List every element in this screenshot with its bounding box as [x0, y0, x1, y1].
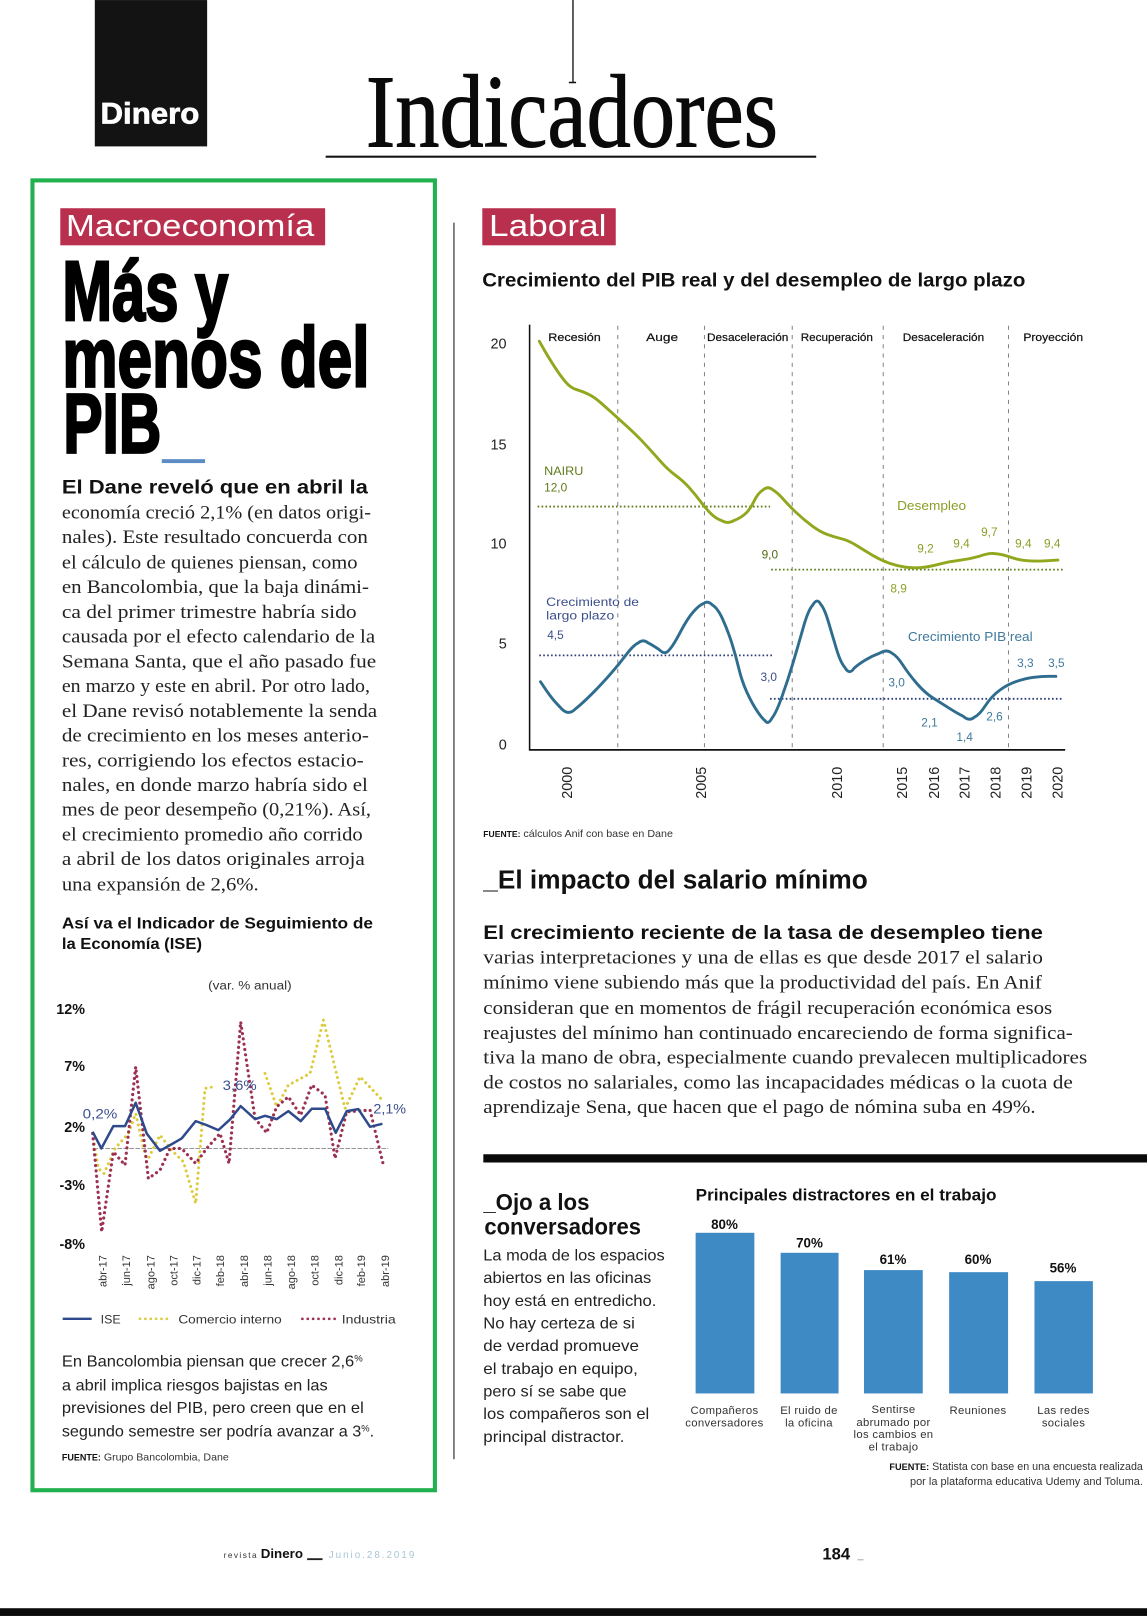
- annotations: unemployment: Desempleo: [897, 498, 966, 513]
- footer: magazine credit: Dinero: [261, 1546, 303, 1561]
- axis labels: 10: [491, 536, 507, 552]
- annotations: unemployment: 9,4: [953, 536, 970, 550]
- text block: article on April GDP: ca del primer trimestre habría sido: [62, 602, 357, 623]
- line chart: ISE, comercio interno, industria: ago-17: [145, 1255, 157, 1289]
- text block: Ojo a los conversadores: de verdad promueve: [483, 1338, 639, 1355]
- heading: impacto del salario mínimo: _El impacto del salario mínimo: [482, 866, 868, 894]
- text block: salario mínimo: tiva la mano de obra, especialmente cuando prevalecen multiplicadores: [483, 1048, 1087, 1069]
- section tag: Macroeconomía: Macroeconomía: [66, 208, 315, 243]
- line chart: ISE, comercio interno, industria: dic-17: [192, 1255, 204, 1285]
- annotations: growth: 3,0: [888, 675, 905, 689]
- text block: salario mínimo: [483, 923, 1087, 1118]
- text block: article on April GDP: a abril de los datos originales arroja: [62, 849, 365, 870]
- series: ISE: [93, 1103, 382, 1151]
- annotations: growth: Crecimiento PIB real: [908, 629, 1033, 644]
- annotations: growth: 1,4: [956, 730, 973, 744]
- axis labels: 2018: [989, 767, 1005, 799]
- axis labels: 5: [499, 636, 507, 652]
- source: Statista: FUENTE: Statista con base en una encuesta realizada: [889, 1461, 1144, 1473]
- phase labels: Recuperación: [801, 332, 873, 344]
- text block: Bancolombia note: [62, 1353, 374, 1441]
- annotations: unemployment: NAIRU: [544, 464, 583, 478]
- text block: salario mínimo: aprendizaje Sena, que hacen que el pago de nómina suba en 49%.: [483, 1097, 1036, 1118]
- text block: Ojo a los conversadores: principal distractor.: [483, 1429, 625, 1446]
- axis labels: [491, 336, 1066, 799]
- annotations: unemployment: 12,0: [544, 481, 568, 495]
- bar chart: distractores: abrumado por: [856, 1417, 931, 1429]
- axis labels: 2010: [830, 767, 846, 799]
- axis labels: 2005: [694, 767, 710, 799]
- text block: salario mínimo: reajustes del mínimo han continuado encareciendo de forma significa-: [483, 1023, 1073, 1044]
- chart title: ISE: Así va el Indicador de Seguimiento de: [62, 916, 373, 933]
- chart title: ISE: la Economía (ISE): [62, 936, 202, 953]
- chart title: ISE: (var. % anual): [208, 978, 292, 992]
- bar chart: distractores: Sentirse: [871, 1404, 916, 1416]
- text block: article on April GDP: economía creció 2,1% (en datos origi-: [62, 502, 371, 523]
- axis labels: 0: [499, 737, 507, 753]
- text block: article on April GDP: causada por el efecto calendario de la: [62, 627, 375, 648]
- bar chart: distractores: [685, 1217, 1093, 1454]
- curve: crecimiento PIB real: [540, 601, 1056, 723]
- section tag: Laboral: Laboral: [489, 208, 606, 243]
- series: comercio interno: [93, 1020, 382, 1203]
- annotations: growth: Crecimiento de: [546, 595, 639, 609]
- axis labels: 20: [491, 336, 507, 352]
- annotations: unemployment: 9,0: [762, 548, 778, 562]
- legend: Industria: [342, 1312, 396, 1326]
- bar chart: distractores: la oficina: [785, 1417, 833, 1429]
- bar chart: distractores: los cambios en: [854, 1429, 933, 1441]
- phase labels: Recesión: [548, 332, 601, 344]
- text block: Bancolombia note: .: [370, 1424, 374, 1441]
- text block: salario mínimo: mínimo viene subiendo más que la productividad del país. En Anif: [483, 972, 1043, 993]
- series: industria: [93, 1022, 383, 1232]
- line chart: ISE, comercio interno, industria: -3%: [60, 1178, 85, 1194]
- annotations: unemployment: 9,2: [917, 541, 934, 555]
- annotations: unemployment: [544, 464, 1061, 596]
- line chart: ISE, comercio interno, industria: dic-18: [333, 1255, 345, 1285]
- text block: Ojo a los conversadores: hoy está en entredicho.: [483, 1293, 656, 1310]
- annotations: growth: largo plazo: [546, 608, 615, 622]
- text block: article on April GDP: de crecimiento en los meses anterio-: [62, 726, 369, 747]
- line chart: ISE, comercio interno, industria: feb-18: [215, 1255, 227, 1286]
- annotations: growth: [546, 595, 1065, 744]
- bar chart: distractores: 80%: [711, 1217, 738, 1232]
- annotations: unemployment: 8,9: [890, 582, 907, 596]
- text block: article on April GDP: el cálculo de quienes piensan, como: [62, 552, 358, 573]
- text block: Ojo a los conversadores: los compañeros son el: [483, 1406, 649, 1423]
- bar chart: distractores: 61%: [880, 1252, 906, 1267]
- line chart: PIB real y desempleo: [491, 325, 1083, 799]
- headline: Más y menos del PIB: [62, 244, 369, 470]
- annotations: unemployment: 9,4: [1015, 536, 1032, 550]
- text block: article on April GDP: nales, en donde marzo habría sido el: [62, 775, 368, 796]
- chart title: PIB y desempleo: Crecimiento del PIB real y del desempleo de largo plazo: [482, 271, 1025, 292]
- bar chart: distractores: Reuniones: [950, 1405, 1006, 1417]
- text block: article on April GDP: El Dane reveló que en abril la: [62, 478, 368, 499]
- text block: article on April GDP: una expansión de 2,6%.: [62, 874, 259, 895]
- line chart: ISE, comercio interno, industria: 7%: [64, 1059, 85, 1075]
- footer: magazine credit: [224, 1546, 414, 1561]
- header: Dinero black tab: [95, 0, 207, 146]
- line chart: ISE, comercio interno, industria: 3,6%: [223, 1077, 257, 1093]
- text block: salario mínimo: El crecimiento reciente de la tasa de desempleo tiene: [483, 923, 1043, 944]
- text block: article on April GDP: en Bancolombia, que la baja dinámi-: [62, 577, 369, 598]
- line chart: ISE, comercio interno, industria: 2,1%: [373, 1100, 406, 1116]
- axis labels: 2019: [1020, 767, 1036, 799]
- text block: article on April GDP: en marzo y este en abril. Por otro lado,: [62, 676, 370, 697]
- chart title: ISE: [62, 916, 373, 992]
- header: page title Indicadores: Indicadores: [366, 53, 778, 169]
- text block: Ojo a los conversadores: No hay certeza de si: [483, 1315, 635, 1332]
- axis labels: 2000: [560, 767, 576, 799]
- chart title: distractores: Principales distractores en el trabajo: [696, 1187, 997, 1205]
- text block: Bancolombia note: En Bancolombia piensan que crecer 2,6: [62, 1354, 345, 1371]
- footer: magazine credit: revista: [224, 1551, 257, 1560]
- annotations: growth: 4,5: [547, 628, 564, 642]
- text block: article on April GDP: [62, 478, 377, 895]
- line chart: ISE, comercio interno, industria: abr-17: [98, 1255, 110, 1287]
- headline: Más y menos del PIB: PIB: [63, 376, 161, 470]
- headline: Más y menos del PIB: Más y: [62, 244, 228, 338]
- text block: Ojo a los conversadores: _Ojo a los: [482, 1189, 589, 1215]
- annotations: growth: 3,0: [761, 670, 777, 684]
- text block: Ojo a los conversadores: pero sí se sabe que: [483, 1383, 627, 1400]
- line chart: ISE, comercio interno, industria: oct-18: [309, 1255, 321, 1286]
- footer: page number: [822, 1545, 864, 1563]
- text block: Bancolombia note: %: [354, 1353, 363, 1363]
- axis labels: 2020: [1050, 767, 1066, 799]
- text block: salario mínimo: varias interpretaciones y una de ellas es que desde 2017 el salario: [483, 948, 1043, 969]
- footer: page number: 184: [822, 1545, 851, 1563]
- legend: ISE: [101, 1312, 121, 1326]
- bar chart: distractores: conversadores: [685, 1417, 764, 1429]
- annotations: growth: 3,3: [1017, 656, 1034, 670]
- text block: Ojo a los conversadores: La moda de los espacios: [483, 1247, 665, 1264]
- text block: article on April GDP: res, corrigiendo los efectos estacio-: [62, 750, 364, 771]
- text block: article on April GDP: el crecimiento promedio año corrido: [62, 824, 363, 845]
- source: Statista: [889, 1461, 1144, 1488]
- panel: Macroeconomía: [32, 180, 435, 1490]
- phase labels: Proyección: [1023, 332, 1083, 344]
- text block: Bancolombia note: %: [361, 1423, 370, 1433]
- axis labels: 2015: [895, 767, 911, 799]
- bar chart: distractores: 60%: [965, 1252, 991, 1267]
- text block: Ojo a los conversadores: conversadores: [484, 1214, 641, 1240]
- curve: desempleo: [539, 341, 1058, 568]
- phase labels: Auge: [646, 332, 678, 344]
- line chart: ISE, comercio interno, industria: oct-17: [168, 1255, 180, 1286]
- text block: Ojo a los conversadores: [482, 1189, 665, 1446]
- axis labels: 2017: [958, 767, 974, 799]
- legend: Comercio interno: [178, 1312, 282, 1326]
- line chart: ISE, comercio interno, industria: jun-17: [121, 1255, 133, 1287]
- bar chart: distractores: sociales: [1042, 1417, 1085, 1429]
- line chart: ISE, comercio interno, industria: [56, 1002, 406, 1326]
- text block: salario mínimo: de costos no salariales, como las incapacidades médicas o la cuota de: [483, 1072, 1073, 1093]
- bar chart: distractores: 70%: [796, 1236, 823, 1251]
- text block: Ojo a los conversadores: abiertos en las oficinas: [483, 1270, 651, 1287]
- footer: magazine credit: Junio.28.2019: [329, 1550, 414, 1561]
- annotations: growth: 3,5: [1048, 656, 1065, 670]
- text block: article on April GDP: el Dane revisó notablemente la senda: [62, 701, 377, 722]
- axis labels: 15: [491, 437, 507, 453]
- annotations: growth: 2,6: [986, 709, 1003, 723]
- text block: Ojo a los conversadores: el trabajo en equipo,: [483, 1361, 638, 1378]
- header: Dinero black tab: Dinero: [100, 98, 199, 131]
- headline: Más y menos del PIB: menos del: [62, 311, 369, 405]
- line chart: ISE, comercio interno, industria: feb-19: [356, 1255, 368, 1286]
- line chart: ISE, comercio interno, industria: abr-19: [380, 1255, 392, 1287]
- bar chart: distractores: Compañeros: [690, 1405, 758, 1417]
- line chart: ISE, comercio interno, industria: -8%: [60, 1237, 85, 1253]
- phase labels: Desaceleración: [707, 332, 788, 344]
- source: Bancolombia: FUENTE: Grupo Bancolombia, Dane: [62, 1452, 229, 1463]
- line chart: ISE, comercio interno, industria: jun-18: [262, 1255, 274, 1287]
- legend: [63, 1312, 396, 1326]
- line chart: ISE, comercio interno, industria: 2%: [64, 1120, 85, 1136]
- bar chart: distractores: el trabajo: [869, 1442, 918, 1454]
- axis labels: 2016: [927, 767, 943, 799]
- source: Statista: por la plataforma educativa Udemy and Toluma.: [910, 1476, 1143, 1488]
- phase labels: [548, 332, 1083, 344]
- annotations: growth: 2,1: [921, 716, 938, 730]
- annotations: unemployment: 9,7: [981, 525, 998, 539]
- line chart: ISE, comercio interno, industria: 0,2%: [83, 1105, 117, 1121]
- bar chart: distractores: Las redes: [1037, 1405, 1090, 1417]
- phase labels: Desaceleración: [903, 332, 984, 344]
- source: Anif: FUENTE: cálculos Anif con base en Dane: [483, 829, 673, 840]
- reference lines: NAIRU and long-run growth: [538, 507, 1063, 699]
- text block: article on April GDP: Semana Santa, que el año pasado fue: [62, 651, 376, 672]
- bar chart: distractores: El ruido de: [780, 1405, 838, 1417]
- text block: Bancolombia note: a abril implica riesgos bajistas en las: [62, 1377, 328, 1394]
- annotations: unemployment: 9,4: [1044, 536, 1061, 550]
- bar chart: distractores: 56%: [1050, 1260, 1076, 1275]
- line chart: ISE, comercio interno, industria: abr-18: [239, 1255, 251, 1287]
- text block: article on April GDP: nales). Este resultado concuerda con: [62, 527, 368, 548]
- text block: article on April GDP: mes de peor desempeño (0,21%). Así,: [62, 800, 371, 821]
- text block: Bancolombia note: previsiones del PIB, pero creen que en el: [62, 1400, 364, 1417]
- line chart: ISE, comercio interno, industria: ago-18: [286, 1255, 298, 1289]
- text block: salario mínimo: consideran que en momentos de frágil recuperación económica esos: [483, 998, 1052, 1019]
- line chart: ISE, comercio interno, industria: 12%: [56, 1002, 85, 1018]
- text block: Bancolombia note: segundo semestre ser podría avanzar a 3: [62, 1424, 357, 1441]
